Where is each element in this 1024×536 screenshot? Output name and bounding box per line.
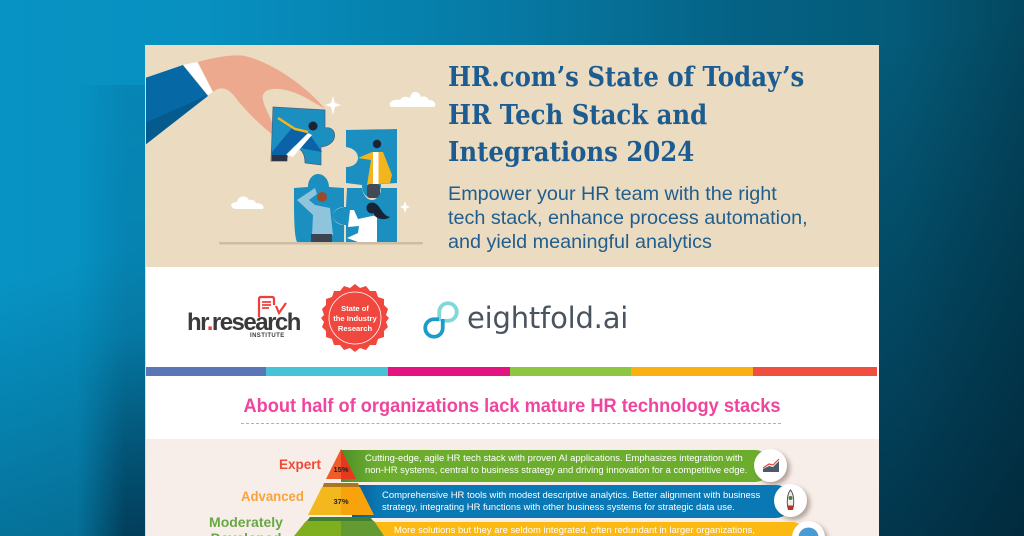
title (448, 62, 804, 168)
percentage: 37% (333, 497, 348, 506)
puzzle piece top-right (346, 129, 397, 198)
icon: growth chart (754, 449, 787, 482)
colour stripe (146, 367, 877, 376)
puzzle piece top-left (271, 107, 335, 165)
pyramid lower (294, 517, 384, 536)
icon: rocket (774, 484, 807, 517)
card shadow (78, 85, 145, 536)
label: Expert (279, 457, 321, 472)
description: strategy, integrating HR functions with other business systems for strategic data use. (382, 502, 735, 513)
label: Moderately (209, 514, 283, 530)
band (360, 522, 808, 536)
description: Cutting-edge, agile HR tech stack with proven AI applications. Emphasizes integration with (365, 453, 743, 464)
description: non-HR systems, central to business strategy and driving innovation for a competitive edge. (365, 465, 747, 476)
level: expert (279, 449, 793, 486)
infographic card (145, 45, 879, 536)
icon: globe (792, 521, 825, 536)
level: moderately developed (209, 514, 830, 536)
pyramid middle (308, 483, 374, 515)
badge text: the Industry (333, 314, 377, 323)
badge: state of the industry research (321, 284, 389, 352)
wordmark: eightfold.ai (467, 301, 628, 335)
puzzle piece bottom-left (294, 174, 344, 242)
title: HR.com’s State of Today’s (448, 62, 804, 93)
sparkles (325, 96, 341, 115)
description: More solutions but they are seldom integrated, often redundant in larger organizations, (394, 525, 755, 536)
institute label: INSTITUTE (250, 333, 285, 339)
badge text: State of (341, 304, 369, 313)
maturity panel (145, 439, 879, 536)
puzzle piece bottom-right (333, 188, 397, 242)
subtitle: Empower your HR team with the right (448, 183, 777, 205)
subtitle (448, 183, 808, 253)
description: Comprehensive HR tools with modest descriptive analytics. Better alignment with business (382, 490, 760, 501)
subtitle: and yield meaningful analytics (448, 231, 712, 253)
badge text: Research (338, 324, 372, 333)
level: advanced (241, 483, 813, 522)
hand (198, 55, 325, 135)
band (341, 450, 771, 482)
header panel (145, 45, 879, 267)
illustration: hand assembling puzzle (146, 55, 436, 244)
icon: research document (258, 296, 287, 317)
description (365, 453, 747, 476)
title: HR Tech Stack and (448, 100, 707, 130)
percentage: 15% (333, 465, 348, 474)
description (382, 490, 760, 513)
sleeve (145, 65, 208, 145)
subtitle: tech stack, enhance process automation, (448, 207, 808, 229)
icon: eightfold loop (423, 301, 459, 339)
card edge highlight (145, 45, 146, 536)
section heading: About half of organizations lack mature HR technology stacks (243, 396, 781, 417)
logo: hr.research institute (187, 296, 300, 339)
band (352, 485, 792, 518)
pyramid tip (326, 449, 356, 479)
ground shadow (219, 242, 423, 244)
wordmark: hr.research (187, 309, 300, 336)
badge text (333, 304, 377, 333)
label: Advanced (241, 488, 304, 504)
title: Integrations 2024 (448, 137, 694, 168)
heading underline (241, 423, 781, 424)
clouds (390, 92, 435, 107)
logo: eightfold.ai (423, 301, 628, 339)
